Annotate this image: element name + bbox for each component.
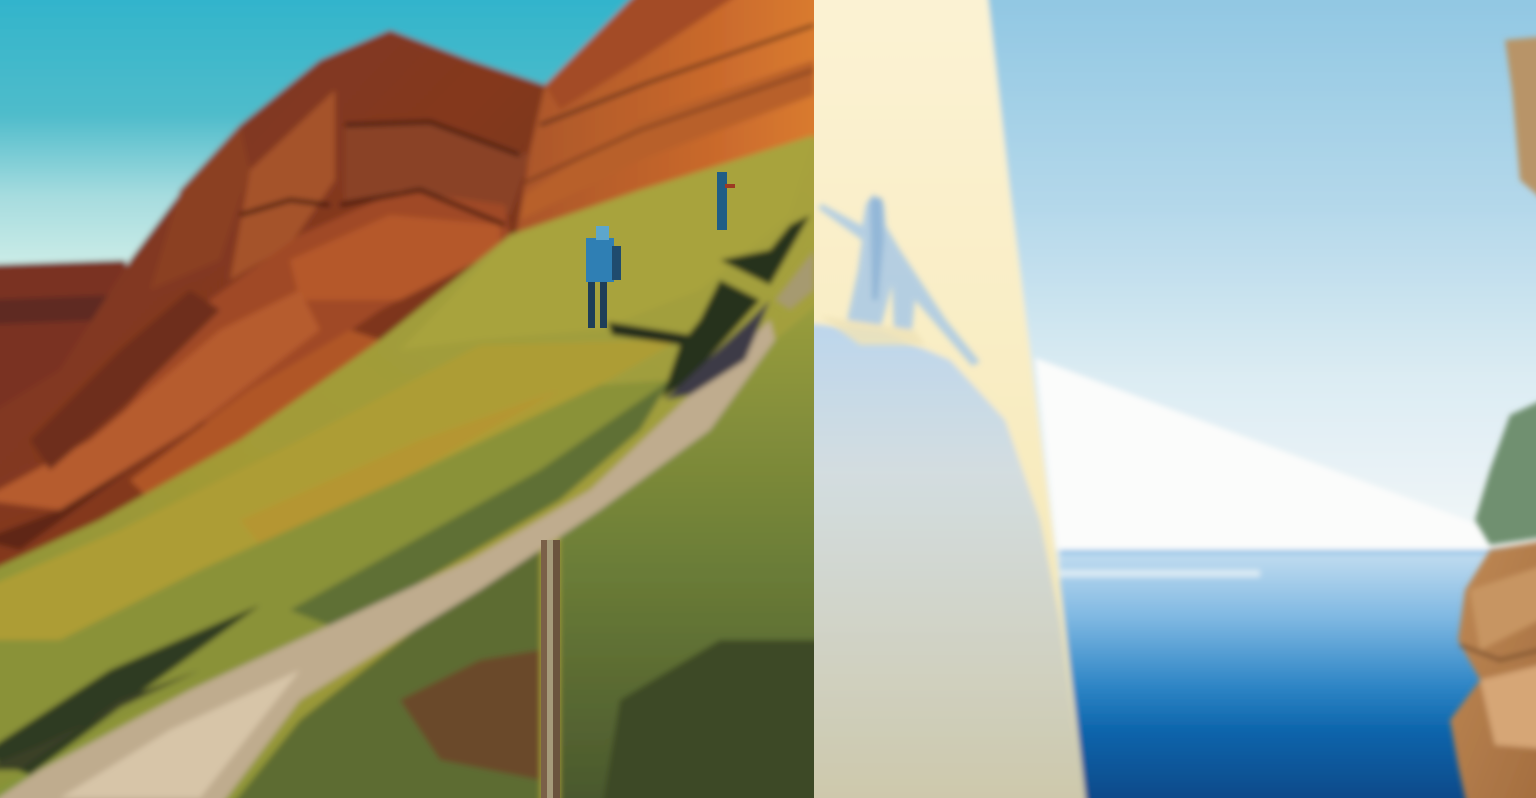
rocky edge [775,250,814,310]
hiker: foreground [586,226,621,328]
dark bush patch [600,640,840,798]
tall pale wall [790,0,1088,798]
trail [0,320,775,798]
right boulders [1450,538,1536,798]
hiker and path shadows [608,322,690,345]
bottom-centre grass [220,550,540,798]
sky [0,0,840,280]
panel: coastal scene [814,0,1536,798]
blue figure on wall [818,194,980,366]
dark foot of slope [0,605,260,775]
white cloud bank [1035,358,1490,550]
shaded base of wall [790,322,1088,798]
green lower slope [0,380,670,798]
upper lit slope [400,135,814,350]
sea [1060,550,1536,798]
brown bare patch [400,650,540,780]
distant mesa [0,260,160,440]
sky [800,0,1536,550]
blue shadow on trail [665,300,770,400]
lit yellow grass band [0,340,680,650]
hiker: distant [717,172,735,230]
panel: canyon scene [0,0,814,798]
right tree foliage [1475,392,1536,545]
upper tree foliage [1505,35,1536,215]
main red rock formation [0,30,545,620]
orange cliff [505,0,840,240]
grassy hillside [0,130,840,798]
signpost [541,540,560,798]
right hill [560,285,840,798]
